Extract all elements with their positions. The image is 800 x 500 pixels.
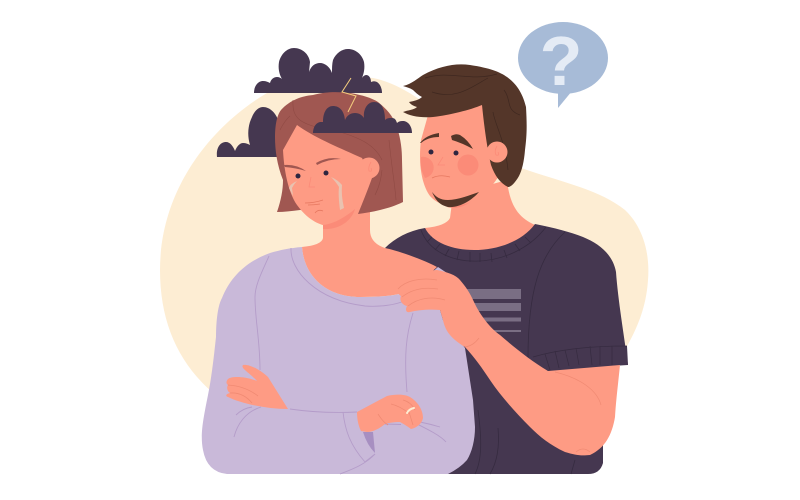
man: hair [403,64,527,187]
man: arm and hand [397,270,620,455]
man: sleeve cuff [533,346,628,371]
man: head [420,100,502,208]
woman: neck and chest skin [302,205,437,297]
cloud two (over hair) [313,102,412,133]
woman: hair [275,92,403,214]
woman: cuff shadow [363,432,375,453]
man: shirt stripes [466,289,521,332]
lightning bolt [342,78,356,112]
speech bubble with question mark: ? [540,22,582,100]
man: ear [486,142,508,162]
woman: face [283,125,380,229]
man: neck [425,180,535,262]
woman: left hand [226,365,288,409]
woman: right hand with ring [357,395,423,432]
woman: hair strands [280,100,396,200]
cloud one (top) [254,48,382,93]
cream background blob [160,76,648,470]
man: shirt seams [421,227,575,474]
woman: sweater [202,247,475,474]
man: hair strands [425,74,520,170]
cloud behind woman [217,107,285,157]
speech bubble with question mark [518,22,608,108]
woman: sweater seams [234,248,446,474]
man: shirt [385,224,628,474]
